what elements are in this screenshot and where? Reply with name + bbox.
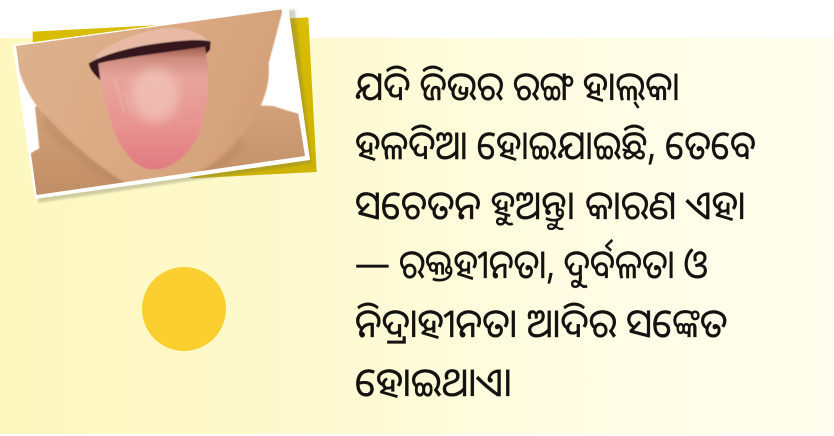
jaw shadow: [45, 122, 61, 137]
yellow backing card: [33, 17, 317, 178]
body text: ନିଦ୍ରାହୀନତା ଆଦିର ସଙ୍କେତ: [355, 294, 727, 349]
photo white frame: [13, 7, 310, 199]
mouth: [89, 40, 211, 80]
body text: — ରକ୍ତହୀନତା, ଦୁର୍ବଳତା ଓ: [355, 235, 708, 290]
tongue: [98, 47, 208, 169]
upper lip: [95, 28, 209, 60]
yellow circle: [142, 267, 226, 351]
photo shadow: [20, 9, 312, 203]
body text: ସଚେତନ ହୁଅନ୍ତୁ। କାରଣ ଏହା: [355, 176, 745, 231]
body text: ହୋଇଥାଏ।: [355, 353, 513, 408]
photo of tongue with yellow backing: [12, 8, 317, 204]
tongue highlight: [131, 68, 179, 122]
body text: ଯଦି ଜିଭର ରଙ୍ଗ ହାଲ୍‌କା: [355, 57, 680, 112]
photo content: [16, 10, 305, 195]
body text: ହଳଦିଆ ହୋଇଯାଇଛି, ତେବେ: [355, 116, 756, 171]
neck: [30, 104, 305, 195]
face: [10, 5, 284, 184]
body text: [355, 57, 756, 408]
tongue folds: [116, 86, 132, 114]
